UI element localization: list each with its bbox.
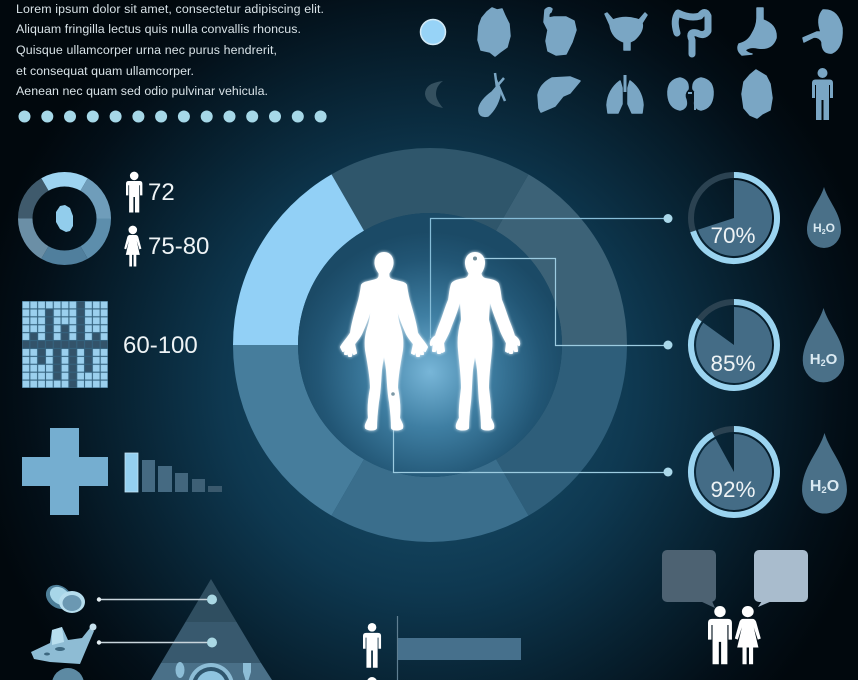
icon: stomach (738, 8, 776, 55)
text block: intro (16, 2, 324, 98)
icon: water drop small: H (813, 221, 822, 235)
icon: water drop small: 2 (822, 229, 826, 236)
icon: spoon (176, 662, 184, 678)
icon: body pictogram (812, 68, 833, 120)
inner disc (298, 213, 562, 477)
icon: medical cross (22, 428, 108, 515)
icon: third food (52, 668, 84, 680)
ring segment: top (332, 148, 528, 231)
icon: water drop small: O (826, 221, 835, 235)
horizontal bar chart (363, 616, 521, 680)
figure: male body (431, 253, 519, 430)
speech bubble: dark (662, 550, 716, 608)
value: male heart rate: 72 (148, 179, 175, 206)
icon: water drop medium (803, 308, 844, 382)
text block: intro: Quisque ullamcorper urna nec purus hendrerit, (16, 43, 277, 57)
text block: intro: Aenean nec quam sed odio pulvinar vehicula. (16, 84, 268, 98)
donut chart: heart rate (18, 172, 111, 265)
pie chart: 70%: 70% (710, 223, 756, 248)
pixel grid: pulse (22, 301, 108, 388)
marker: knee point (391, 392, 395, 396)
ring segment: highlighted (233, 174, 364, 345)
figure: female body (341, 253, 427, 430)
icon: water drop small (807, 187, 841, 248)
pie chart: 70% (691, 175, 777, 261)
axis (396, 616, 398, 680)
icon: sun (420, 20, 446, 44)
bar: male (398, 638, 521, 660)
pie chart: 92% (691, 429, 777, 515)
icon: water drop large: H (810, 478, 821, 495)
icon: second person head (367, 677, 377, 680)
icon: liver (538, 77, 580, 112)
icon: nuts (41, 580, 85, 614)
icon: water drop medium: H (810, 351, 821, 368)
panel: central ring (233, 148, 627, 542)
icon: gallbladder (479, 73, 505, 116)
icon: heart outline (742, 70, 772, 118)
ring segment: lower right (496, 345, 627, 516)
icon: bladder (605, 13, 647, 50)
ring segment: upper right (496, 174, 627, 345)
connector: middle pie (478, 258, 667, 346)
icon: heart (478, 8, 510, 56)
text block: intro: Aliquam fringilla lectus quis nulla convallis rhoncus. (16, 22, 301, 36)
pie chart: 85% (691, 302, 777, 388)
icon: kidneys (668, 78, 713, 110)
pie chart: 92%: 92% (710, 477, 756, 502)
ring segment: lower left (233, 345, 364, 516)
icon: water drop medium: O (826, 351, 838, 368)
pie chart: 85%: 85% (710, 351, 756, 376)
connector: top pie (430, 218, 667, 338)
ring segment: bottom (332, 459, 528, 542)
icon: cheese and meat (31, 624, 96, 664)
icon: water drop large: 2 (821, 485, 827, 496)
text block: intro: et consequat quam ullamcorper. (16, 64, 194, 78)
organ icons (478, 8, 842, 120)
value: pulse range: 60-100 (123, 332, 198, 359)
value: female heart rate: 75-80 (148, 233, 209, 260)
speech bubble: light (754, 550, 808, 607)
icon: man (126, 172, 142, 213)
marker: head point (473, 256, 477, 260)
text block: intro: Lorem ipsum dolor sit amet, consectetur adipiscing elit. (16, 2, 324, 16)
icon: colon (675, 12, 708, 54)
food pyramid (151, 579, 272, 680)
icon: man (363, 623, 381, 668)
connector: bottom pie (394, 395, 667, 472)
icon: water drop medium: 2 (821, 358, 826, 368)
icon: pancreas (544, 8, 576, 55)
icon: water drop large: O (827, 478, 839, 495)
bar chart: small descending (125, 453, 222, 492)
icon: couple (708, 606, 761, 664)
food line: middle (97, 638, 217, 648)
connector dots (664, 214, 672, 476)
dotted row (18, 110, 327, 122)
icon: kidney (803, 10, 842, 53)
food line: top (97, 594, 217, 604)
icon: moon (425, 81, 443, 108)
icon: water drop large (802, 433, 847, 514)
icon: plate (188, 663, 234, 680)
icon: heart small (56, 205, 73, 232)
icon: fork (243, 663, 251, 680)
icon: woman (124, 226, 141, 267)
icon: lungs (607, 75, 643, 113)
